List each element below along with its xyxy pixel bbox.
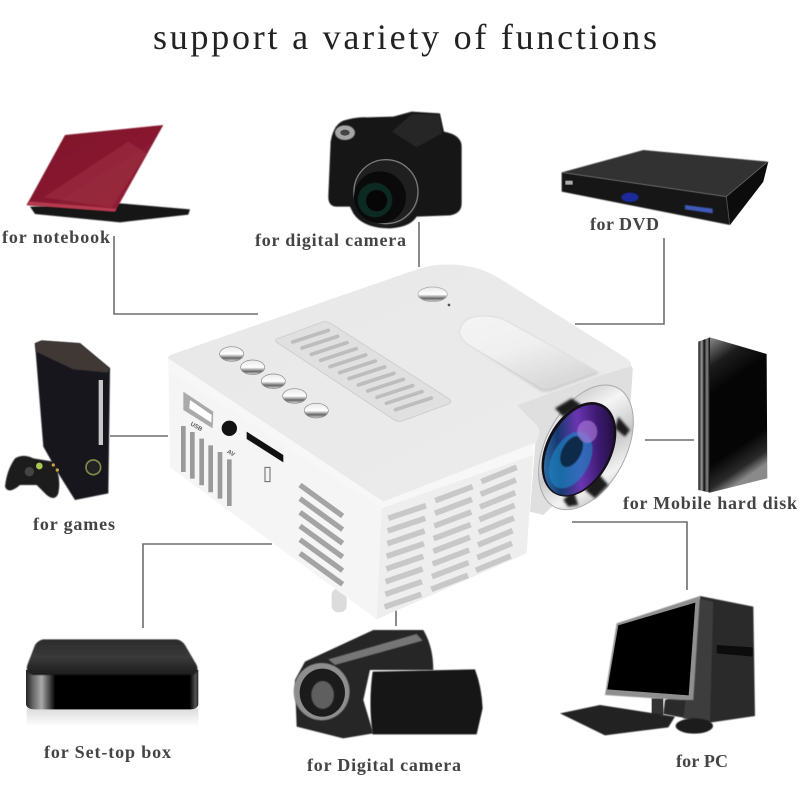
- button 1: [220, 347, 244, 361]
- lens chrome ring: [519, 369, 653, 526]
- lens barrel hump shadow: [460, 317, 600, 392]
- indicator dot: [448, 304, 450, 306]
- device: desktop PC: [560, 596, 755, 735]
- label: notebook: for notebook: [2, 227, 110, 247]
- label: mobile hard disk: for Mobile hard disk: [623, 493, 797, 513]
- projector support foot: [332, 588, 347, 612]
- lens inner reflections: [540, 424, 602, 496]
- label: games: for games: [33, 514, 115, 534]
- SD card slot: [247, 432, 283, 462]
- projector front side: [377, 455, 533, 619]
- device: set-top box: [26, 639, 198, 727]
- connector: DVD: [575, 238, 664, 324]
- projector front rim: [168, 358, 533, 508]
- AV jack: [222, 421, 237, 436]
- label: set-top box: for Set-top box: [44, 742, 171, 762]
- top vent slots: [293, 330, 431, 410]
- projector top face: [168, 265, 631, 502]
- lens chrome dark wedges: [555, 398, 630, 507]
- connector: camcorder: [395, 610, 397, 626]
- device: mini projector: [168, 265, 653, 619]
- USB port: [183, 392, 213, 428]
- device: mobile hard disk: [698, 337, 767, 493]
- side vents left: [183, 426, 229, 506]
- label: DVD: for DVD: [590, 214, 659, 234]
- label: PC: for PC: [676, 751, 728, 771]
- button 4: [283, 389, 307, 403]
- menu buttons: [220, 347, 328, 418]
- connector: digital camera: [418, 222, 420, 267]
- device: red notebook: [27, 125, 190, 222]
- label: digital camera: for digital camera: [255, 230, 406, 250]
- lens dark collar: [526, 389, 632, 509]
- connector: games: [110, 435, 168, 437]
- USB label: USB: [189, 422, 204, 433]
- connector: PC: [572, 522, 687, 590]
- lens glass: [530, 393, 628, 507]
- device: DVD player: [562, 150, 768, 225]
- projector left side: [168, 358, 382, 619]
- device: camcorder: [294, 630, 483, 738]
- front vents: [385, 467, 517, 607]
- connector: mobile hard disk: [645, 439, 694, 441]
- projector rear housing: [517, 365, 633, 515]
- connector: set-top box: [143, 544, 272, 628]
- SD icon: [265, 467, 270, 482]
- button 5: [304, 403, 328, 418]
- label: camcorder: for Digital camera: [307, 755, 461, 775]
- device: digital camera: [328, 112, 462, 228]
- connector: notebook: [114, 236, 258, 314]
- lens barrel hump: [460, 317, 597, 388]
- USB port opening: [189, 400, 212, 423]
- side vents right: [300, 485, 343, 584]
- button 3: [261, 374, 285, 389]
- AV label: AV: [226, 449, 235, 458]
- power button: [418, 287, 447, 302]
- projector lens: [519, 369, 653, 526]
- button 2: [241, 360, 265, 375]
- top vent panel: [275, 322, 451, 421]
- device: game console and controller: [5, 341, 110, 500]
- title: support a variety of functions: [153, 17, 657, 57]
